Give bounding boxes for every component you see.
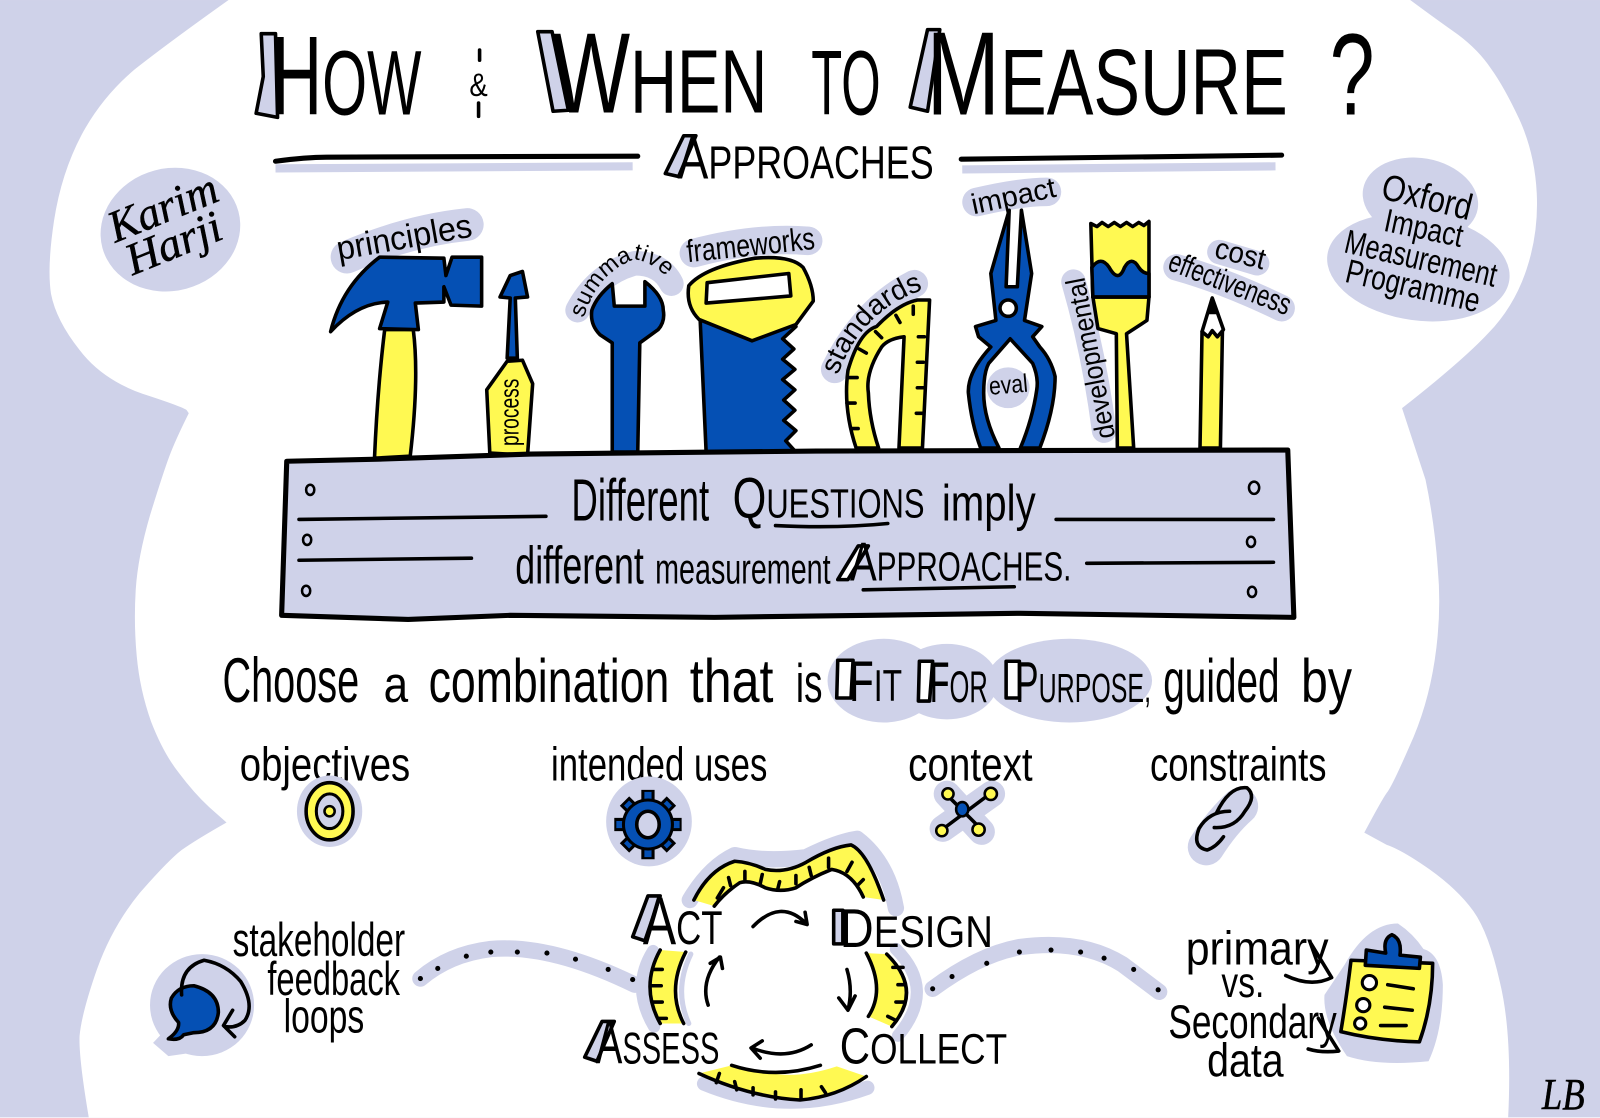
tool: hammer: principles [334, 208, 475, 268]
cycle tape and stages: DESIGN [840, 897, 993, 959]
plank: different questions: measurement [655, 546, 831, 594]
stage act [633, 896, 660, 941]
letter block M [910, 30, 940, 111]
fit for purpose sentence: guided [1163, 647, 1280, 715]
tool: screwdriver: process [494, 379, 524, 446]
author bubble [87, 152, 254, 307]
tool: pencil: cost [1212, 232, 1269, 276]
ampersand [469, 50, 488, 116]
primary vs secondary data: Secondary [1168, 996, 1337, 1048]
tool: pliers [968, 172, 1059, 448]
tool: wrench [565, 244, 684, 451]
tool: wrench: summative [573, 244, 672, 317]
ampersand: & [469, 66, 488, 103]
factor: constraints [1150, 739, 1327, 850]
tape bottom [699, 1065, 866, 1100]
question mark: ? [1330, 9, 1374, 139]
dotted connector right [930, 945, 1161, 992]
cycle tape and stages: ASSESS [596, 1008, 719, 1076]
highlight blob [828, 639, 1152, 722]
subtitle approaches: APPROACHES [678, 125, 934, 192]
tool: protractor [821, 270, 932, 448]
fit for purpose sentence: FOR [930, 651, 988, 715]
artist signature: LB [1541, 1069, 1585, 1118]
fit for purpose sentence [222, 639, 1352, 722]
author bubble: Karim [99, 163, 225, 253]
title word how: HOW [271, 12, 422, 138]
primary vs secondary data: vs. [1221, 959, 1264, 1007]
title [256, 8, 1374, 140]
factor: intended uses [551, 739, 767, 866]
factor: context [908, 739, 1033, 836]
primary vs secondary data: primary [1186, 922, 1329, 974]
factor: constraints: constraints [1150, 739, 1327, 791]
author bubble: Harji [117, 201, 229, 285]
programme bubble: Impact [1381, 201, 1467, 254]
tool: hammer [331, 208, 482, 458]
stage design [834, 910, 843, 944]
icon: loop arrow [181, 960, 249, 1037]
plank line one: Different [571, 466, 709, 533]
primary vs secondary data [1168, 922, 1443, 1087]
factor: objectives [240, 739, 410, 847]
stakeholder feedback loops: feedback [267, 953, 400, 1005]
stakeholder feedback loops [150, 914, 405, 1056]
factor: intended uses: intended uses [551, 739, 767, 791]
icon: clipboard [1341, 935, 1433, 1042]
subtitle approaches [276, 125, 1282, 192]
icon: speech bubble [168, 986, 218, 1039]
primary vs secondary data: data [1207, 1035, 1284, 1087]
fit for purpose sentence: Choose [222, 646, 359, 716]
cycle tape and stages: ACT [643, 884, 722, 959]
tool: pencil: effectiveness [1164, 244, 1296, 322]
cycle tape and stages [585, 839, 1007, 1102]
tape left [650, 950, 686, 1023]
tool: pliers: eval [988, 370, 1029, 401]
letter block H [256, 34, 278, 117]
fit for purpose sentence: FIT [849, 650, 902, 714]
stage assess [585, 1021, 614, 1061]
tool: pencil [1164, 232, 1296, 448]
programme bubble: Oxford [1378, 166, 1477, 228]
tool: pliers: impact [968, 172, 1059, 221]
plank line two: different [515, 537, 644, 596]
tool: saw [685, 220, 816, 452]
stakeholder feedback loops: stakeholder [233, 914, 405, 966]
letter block W [538, 32, 568, 111]
title word to: TO [811, 32, 881, 134]
plank screw holes [302, 482, 1259, 597]
plank: different questions: APPROACHES. [850, 531, 1071, 593]
tool: protractor: standards [825, 277, 921, 374]
stage collect: COLLECT [840, 1017, 1007, 1074]
icon: chain link [1197, 788, 1252, 850]
tool: saw: frameworks [685, 220, 816, 269]
plank: different questions [282, 450, 1294, 619]
tape right [866, 953, 906, 1027]
dotted connector left [418, 948, 635, 985]
fit for purpose sentence: by [1301, 647, 1352, 715]
tool: screwdriver [487, 271, 533, 455]
tool: paintbrush [1060, 221, 1149, 448]
fit for purpose sentence: a [384, 656, 409, 713]
fit for purpose sentence: combination [429, 647, 669, 715]
cycle arrows [706, 911, 855, 1058]
fit for purpose sentence: PURPOSE, [1015, 651, 1151, 715]
fit for purpose sentence: that [690, 647, 773, 715]
tape lavender shadows [690, 839, 896, 908]
tape top [694, 845, 884, 906]
factor: objectives: objectives [240, 739, 410, 791]
stakeholder feedback loops: loops [284, 991, 364, 1043]
factor: context: context [908, 739, 1033, 791]
icon: gear [614, 790, 682, 859]
title word when: WHEN [552, 10, 767, 137]
programme bubble [1320, 149, 1517, 333]
programme bubble: Measurement [1341, 224, 1501, 295]
programme bubble: Programme [1342, 253, 1484, 320]
title word measure: MEASURE [927, 8, 1288, 140]
plank: different questions: QUESTIONS [733, 466, 924, 530]
tool: paintbrush: developmental [1060, 275, 1121, 442]
plank: different questions: imply [942, 474, 1036, 531]
fit for purpose sentence: is [796, 652, 822, 714]
